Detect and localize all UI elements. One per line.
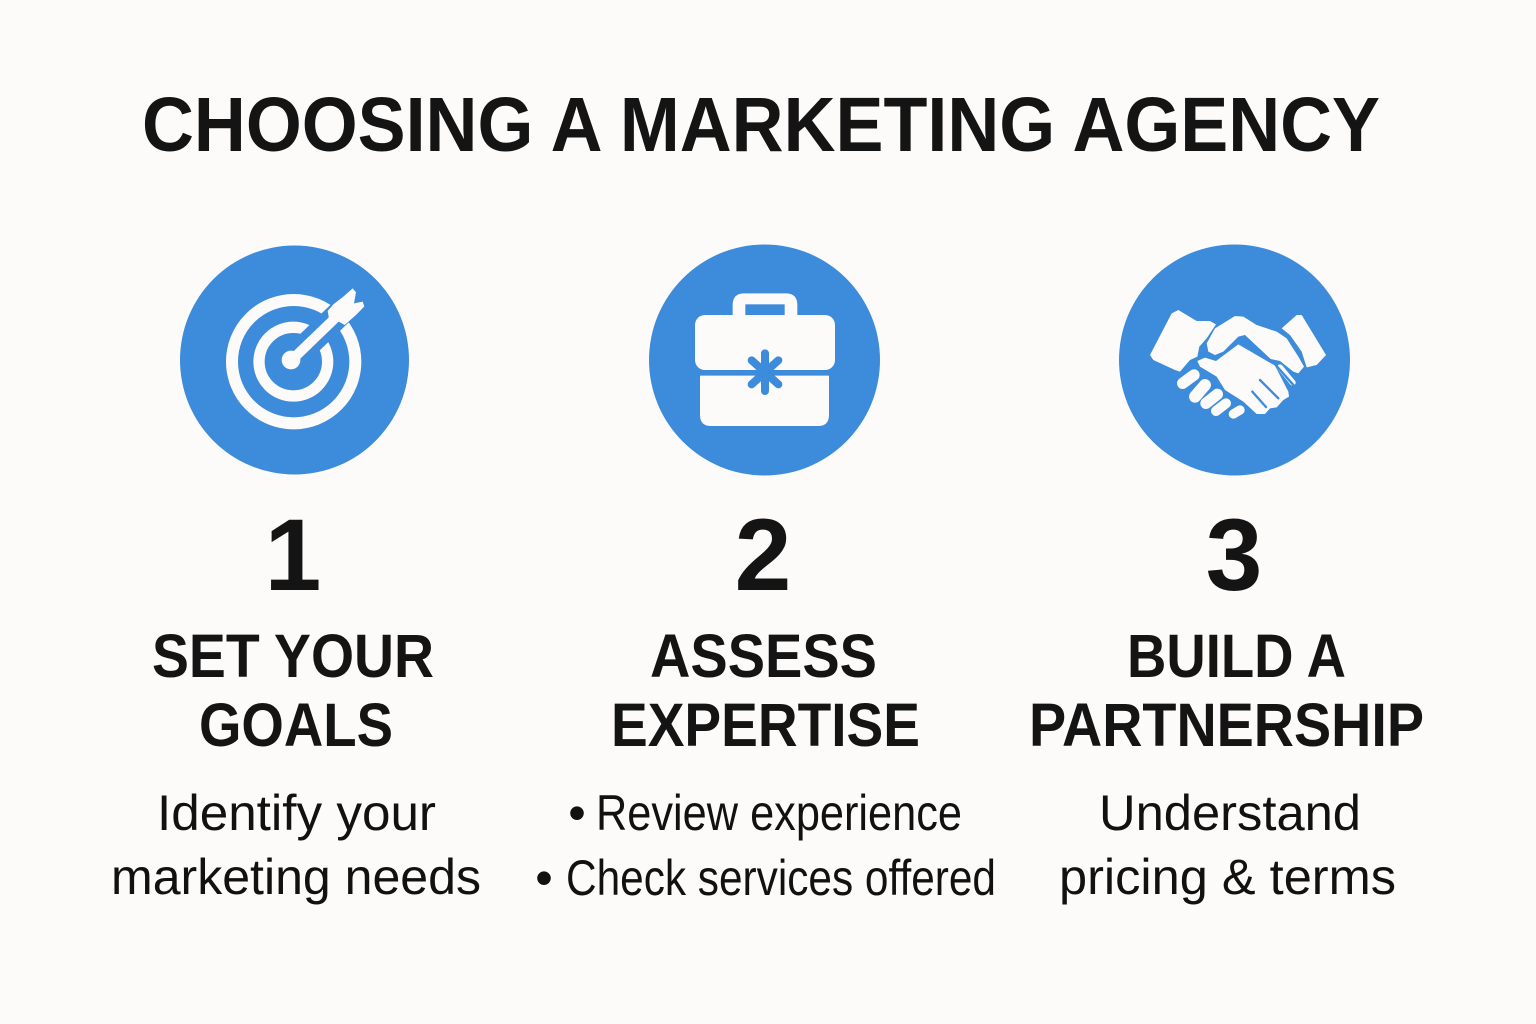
description: set your goals: Identify your	[157, 785, 436, 841]
heading: assess expertise: EXPERTISE	[611, 691, 920, 759]
description: set your goals	[111, 785, 481, 905]
heading: build a partnership	[1029, 622, 1424, 759]
description: build a partnership	[1059, 785, 1396, 905]
heading: set your goals	[152, 622, 434, 759]
icon: handshake	[1119, 244, 1350, 476]
description: build a partnership: Understand	[1099, 785, 1361, 841]
panel: step 3 build a partnership	[1029, 244, 1424, 905]
description: assess expertise bullets: •	[535, 850, 553, 906]
panel: step 1 set your goals	[111, 246, 481, 905]
heading: build a partnership: PARTNERSHIP	[1029, 691, 1424, 759]
description: assess expertise bullets: •	[568, 785, 586, 841]
description: build a partnership: pricing & terms	[1059, 849, 1396, 905]
icon: briefcase	[649, 244, 880, 476]
title: CHOOSING A MARKETING AGENCY	[142, 82, 1380, 168]
number 2: 2	[735, 498, 791, 612]
icon: target with arrow	[180, 246, 409, 474]
number 3: 3	[1206, 498, 1262, 612]
description: assess expertise bullets	[535, 785, 996, 906]
heading: set your goals: GOALS	[199, 691, 393, 759]
heading: assess expertise: ASSESS	[650, 622, 877, 690]
heading: build a partnership: BUILD A	[1127, 622, 1346, 690]
description: set your goals: marketing needs	[111, 849, 481, 905]
number 1: 1	[265, 498, 321, 612]
description: assess expertise bullets: Check services offered	[566, 850, 996, 906]
panel: step 2 assess expertise	[535, 244, 996, 906]
description: assess expertise bullets: Review experience	[596, 785, 962, 841]
heading: assess expertise	[611, 622, 920, 759]
heading: set your goals: SET YOUR	[152, 622, 434, 690]
